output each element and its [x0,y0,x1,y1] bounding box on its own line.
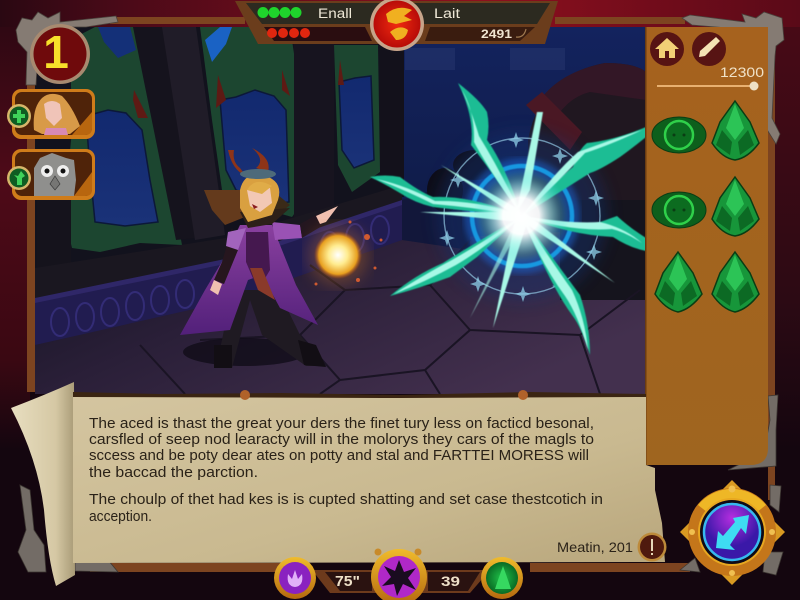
arms [214,228,238,284]
body text: sccess and be poty dear ates on potty and stal and FARTTEI MORESS will [89,447,589,464]
green gem 4 [712,252,759,312]
balustrade [35,203,402,345]
green eye token 2 [652,192,706,228]
green gem 2 [712,177,759,236]
green gem 1 [712,101,759,160]
signature: Meatin, 201 [557,539,633,555]
slider [657,82,758,90]
emblem [370,0,424,51]
green eye token 1 [652,117,706,153]
body text [89,415,603,525]
parchment curl [11,382,75,586]
red pips [267,28,310,38]
green orb [481,557,523,599]
center orb [371,548,427,600]
far balcony band [402,178,470,250]
corner ornament: lower right [680,395,783,575]
far wall arches [405,48,565,70]
pin right [518,390,528,400]
body text: the baccad the parction. [89,464,258,481]
dress [180,225,318,335]
parchment [73,390,666,563]
score value: 12300 [720,64,764,80]
green pips [258,7,302,18]
character: sorceress [180,148,338,368]
legs [216,290,326,368]
home button [650,32,684,66]
compass action button [680,480,785,585]
edit button [692,32,726,66]
burst arms [370,83,646,355]
wings [204,190,243,225]
green gem 3 [655,252,702,312]
level badge: 1 [43,26,69,78]
body text: acception. [89,508,152,525]
player label: Enall [318,6,352,21]
window frames [64,27,380,252]
score: 2491 [481,29,513,41]
left wall [35,27,380,268]
purple orb [274,557,316,599]
body text: The choulp of thet had kes is is cupted shatting and set case thestcotich in [89,491,603,508]
portrait card: heroine [7,89,95,139]
corner ornament: top right [682,12,784,144]
bottom bar [274,548,523,600]
level badge [30,24,90,84]
pin left [240,390,250,400]
floor [35,228,646,394]
floor tiles [140,240,640,394]
pillars [64,27,404,244]
time value: 75" [335,573,360,590]
ledge [64,200,402,292]
hair and face [240,175,279,222]
body text: The aced is thast the great your ders the finet tury less on facticd besonal, [89,415,594,432]
opponent label: Lait [434,6,460,21]
corner ornament: top left [16,12,118,85]
corner ornament: lower left [18,485,118,572]
add button [7,104,31,128]
top status bar [235,1,558,44]
counter value: 39 [441,573,460,589]
collar [240,208,290,228]
portrait card: owl [7,149,95,200]
body text: carsfled of seep nod learacty will in the molorys they cars of the magls to [89,431,594,448]
right panel [645,27,768,465]
scene: gothic hall [35,27,646,394]
info button [638,532,666,562]
add button [7,166,31,190]
dome [427,63,646,300]
horns [228,150,242,173]
red vine accents [133,60,344,118]
ring glow [437,131,607,302]
fireball [308,220,382,286]
